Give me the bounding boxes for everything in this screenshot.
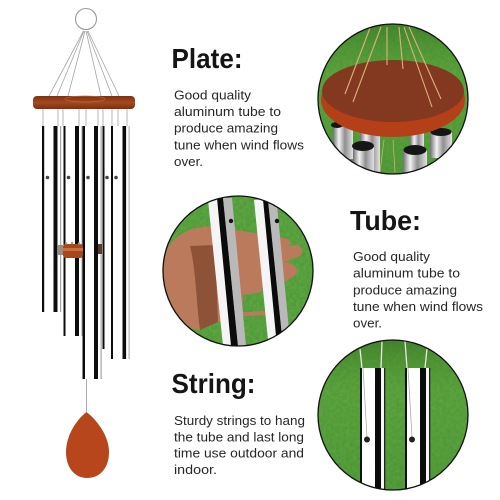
text block: String description [174,413,305,477]
circle: plate close-up [318,24,468,176]
right tube [405,368,430,490]
grass background [318,340,468,490]
hanging ring [76,8,96,30]
text block: Plate description [174,87,305,169]
grass background [318,24,468,174]
text block: Plate description: Good quality [174,87,252,102]
tube openings [331,122,452,155]
plate top surface [322,60,464,122]
heading: String: String: [172,368,256,399]
tube one [208,198,246,346]
text block: Tube description [353,249,484,330]
circle outline [318,24,468,174]
lower strings [380,140,395,172]
text block: Tube description: produce amazing [353,282,457,297]
text block: Plate description: over. [174,154,203,169]
grass background [163,196,313,346]
tube two [254,199,289,340]
plate strings [345,27,441,107]
black tubes [42,126,126,379]
plate side edge [321,63,465,137]
heading: Tube: Tube: [350,205,421,236]
text block: Tube description: Good quality [353,249,431,264]
text block: Plate description: tune when wind flows [174,138,305,152]
small beads [46,176,118,179]
text block: String description: indoor. [174,462,217,477]
text block: String description: the tube and last long [174,429,304,444]
circle outline [318,340,468,490]
wooden wind sail [66,412,109,478]
silver tube edges [60,126,130,379]
circle outline [163,196,313,346]
wind chime product [33,8,135,478]
text block: Tube description: aluminum tube to [353,266,460,281]
beads [229,219,233,223]
circle: string close-up [318,340,468,490]
circle: tube with hand [163,196,313,346]
left tube [360,368,385,490]
text block: Plate description: produce amazing [174,121,278,136]
suspension wires [43,31,127,126]
sail wire [86,379,88,412]
hand [163,226,302,330]
wooden striker [58,242,102,258]
text block: String description: time use outdoor and [174,446,304,461]
palm shadow [190,245,218,330]
text block: String description: Sturdy strings to hang [174,413,305,428]
heading: Plate: Plate: [172,43,242,74]
strings [360,341,427,368]
plate wood grain [65,96,105,102]
text block: Tube description: over. [353,316,382,330]
beads [364,436,370,442]
text block: Plate description: aluminum tube to [174,104,281,119]
text block: Tube description: tune when wind flows [353,299,484,314]
wooden plate [33,96,135,109]
silver tubes [333,126,452,172]
